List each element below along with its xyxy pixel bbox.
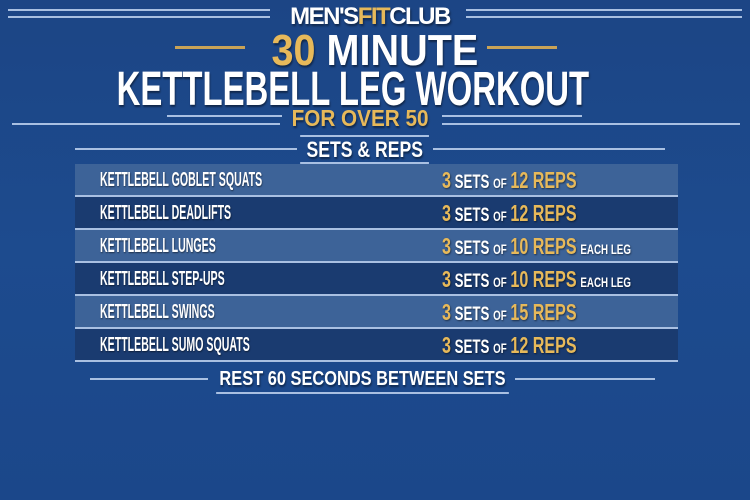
row 2: KETTLEBELL DEADLIFTS: [100, 202, 231, 224]
row 3: KETTLEBELL LUNGES: [100, 235, 216, 257]
row 4: KETTLEBELL STEP-UPS: [100, 268, 225, 290]
row 2: [75, 197, 678, 230]
row 3: [75, 230, 678, 263]
row 6: [75, 329, 678, 362]
row 1: KETTLEBELL GOBLET SQUATS: [100, 169, 262, 191]
row 6: 3 SETS OF 12 REPS: [442, 332, 577, 358]
row 2: 3 SETS OF 12 REPS: [442, 200, 577, 226]
table: [75, 164, 678, 362]
title line 2: KETTLEBELL LEG WORKOUT: [116, 63, 589, 116]
row 4: [75, 263, 678, 296]
row 5: KETTLEBELL SWINGS: [100, 301, 215, 323]
title line 1: 30 MINUTE: [272, 26, 478, 75]
rest note: REST 60 SECONDS BETWEEN SETS: [219, 368, 505, 390]
row 3: 3 SETS OF 10 REPS EACH LEG: [442, 233, 631, 259]
row 1: 3 SETS OF 12 REPS: [442, 167, 577, 193]
row 4: 3 SETS OF 10 REPS EACH LEG: [442, 266, 631, 292]
header lines: brand: [8, 9, 742, 18]
row 5: [75, 296, 678, 329]
row 6: KETTLEBELL SUMO SQUATS: [100, 334, 250, 356]
row 1: [75, 164, 678, 197]
subtitle: FOR OVER 50: [292, 105, 428, 131]
section heading: SETS & REPS: [307, 137, 423, 162]
brand logo: MEN'SFITCLUB: [290, 3, 450, 30]
row 5: 3 SETS OF 15 REPS: [442, 299, 577, 325]
